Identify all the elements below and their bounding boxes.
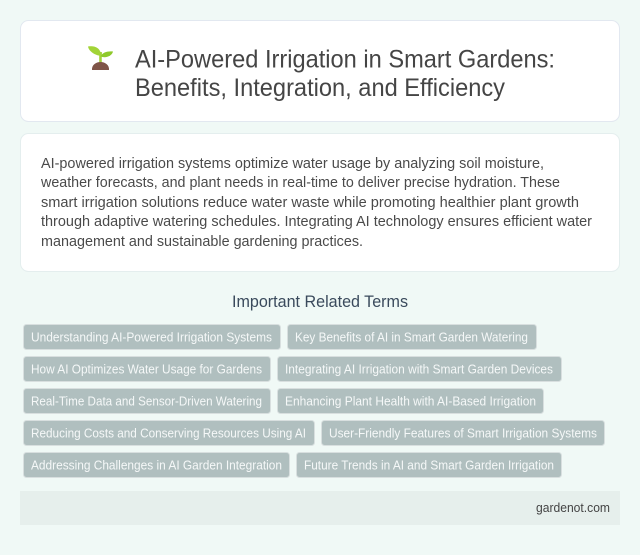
chip — [24, 388, 270, 414]
description text: smart irrigation solutions reduce water waste while promoting healthier plant growth — [41, 195, 579, 211]
title text: AI-Powered Irrigation in Smart Gardens: — [135, 46, 555, 74]
chip: Real-Time Data and Sensor-Driven Watering — [31, 394, 262, 408]
chip: Reducing Costs and Conserving Resources Using AI — [31, 426, 306, 440]
description text — [40, 156, 592, 250]
panel: description — [20, 134, 620, 272]
chip — [24, 324, 280, 350]
chip: Addressing Challenges in AI Garden Integration — [31, 458, 282, 472]
chip list: related terms — [24, 324, 604, 478]
chip — [278, 356, 562, 382]
chip: Enhancing Plant Health with AI-Based Irrigation — [285, 394, 536, 408]
description text: management and sustainable gardening practices. — [41, 234, 363, 250]
chip — [288, 324, 536, 350]
chip: Understanding AI-Powered Irrigation Systems — [31, 330, 272, 344]
chip: How AI Optimizes Water Usage for Gardens — [31, 362, 262, 376]
chip — [296, 452, 562, 478]
title text — [135, 46, 555, 102]
chip: Integrating AI Irrigation with Smart Garden Devices — [285, 362, 553, 376]
chip — [24, 452, 290, 478]
heading: important related terms: Important Related Terms — [232, 292, 408, 311]
chip: Key Benefits of AI in Smart Garden Watering — [295, 330, 528, 344]
description text: AI-powered irrigation systems optimize water usage by analyzing soil moisture, — [41, 156, 544, 172]
chip: Future Trends in AI and Smart Garden Irrigation — [304, 458, 554, 472]
description text: weather forecasts, and plant needs in real-time to deliver precise hydration. These — [40, 175, 560, 191]
description text: through adaptive watering schedules. Integrating AI technology ensures efficient water — [41, 214, 592, 230]
panel: title header — [20, 20, 620, 122]
chip — [278, 388, 544, 414]
chip — [322, 420, 604, 446]
chip — [24, 420, 314, 446]
footer — [20, 491, 620, 525]
title text: Benefits, Integration, and Efficiency — [135, 74, 505, 102]
chip: User-Friendly Features of Smart Irrigation Systems — [329, 426, 597, 440]
chip — [24, 356, 270, 382]
icon: seedling — [88, 46, 113, 70]
footer source text: gardenot.com — [536, 500, 610, 515]
